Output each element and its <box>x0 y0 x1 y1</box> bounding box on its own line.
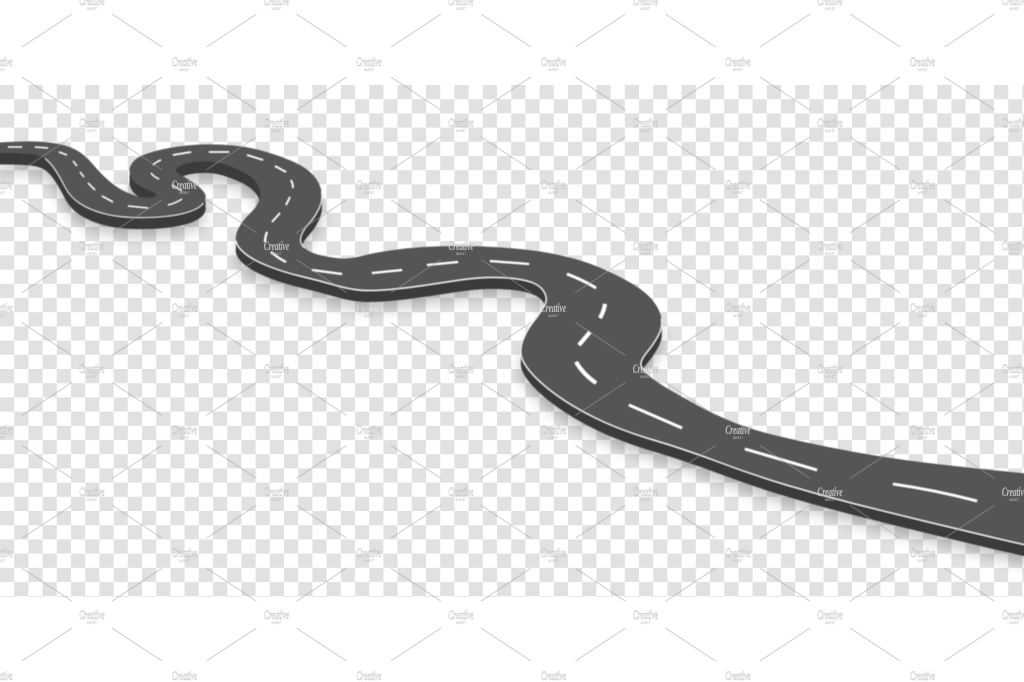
watermark labels: Creative <box>541 422 586 437</box>
watermark labels: MARKET <box>87 129 97 133</box>
white road edge lines <box>45 158 1024 546</box>
watermark labels: MARKET <box>272 375 282 379</box>
watermark labels: MARKET <box>180 559 190 563</box>
watermark labels: Creative <box>817 484 862 499</box>
watermark labels: Creative <box>172 545 217 560</box>
watermark labels: Creative <box>264 238 309 253</box>
watermark labels: MARKET <box>272 129 282 133</box>
watermark labels: MARKET <box>733 314 743 318</box>
watermark labels: MARKET <box>456 621 466 625</box>
watermark labels: MARKET <box>549 559 559 563</box>
watermark labels: MARKET <box>549 436 559 440</box>
watermark labels: Creative <box>79 607 124 622</box>
watermark labels: MARKET <box>456 498 466 502</box>
watermark labels: MARKET <box>825 498 835 502</box>
watermark labels: MARKET <box>180 314 190 318</box>
watermark labels: Creative <box>172 422 217 437</box>
watermark labels: Creative <box>356 545 401 560</box>
road top surface <box>0 141 1024 546</box>
watermark labels: MARKET <box>733 436 743 440</box>
watermark labels: MARKET <box>918 191 928 195</box>
watermark labels: MARKET <box>456 252 466 256</box>
winding road <box>0 141 1024 558</box>
watermark labels: MARKET <box>87 375 97 379</box>
watermark labels: MARKET <box>733 68 743 72</box>
watermark labels: Creative <box>910 300 955 315</box>
watermark labels: MARKET <box>549 191 559 195</box>
watermark labels: MARKET <box>272 252 282 256</box>
watermark labels: Creative <box>725 177 770 192</box>
watermark labels: Creative <box>910 422 955 437</box>
watermark labels: Creative <box>79 361 124 376</box>
road side wall <box>0 147 1024 558</box>
watermark labels: MARKET <box>272 621 282 625</box>
watermark labels: Creative <box>79 238 124 253</box>
watermark labels: Creative <box>633 361 678 376</box>
watermark labels: MARKET <box>272 498 282 502</box>
watermark labels: Creative <box>172 300 217 315</box>
watermark labels: MARKET <box>549 314 559 318</box>
watermark labels: MARKET <box>456 7 466 11</box>
watermark labels: MARKET <box>549 68 559 72</box>
watermark labels: Creative <box>541 300 586 315</box>
watermark labels: MARKET <box>918 314 928 318</box>
watermark labels: Creative <box>817 607 862 622</box>
watermark labels: Creative <box>633 484 678 499</box>
watermark labels: Creative <box>448 115 493 130</box>
watermark labels: Creative <box>633 115 678 130</box>
watermark labels: MARKET <box>733 191 743 195</box>
watermark labels: MARKET <box>364 191 374 195</box>
watermark labels: MARKET <box>456 375 466 379</box>
watermark labels: MARKET <box>641 621 651 625</box>
watermark labels: Creative <box>633 607 678 622</box>
watermark labels: Creative <box>817 361 862 376</box>
watermark labels: MARKET <box>87 7 97 11</box>
watermark labels: MARKET <box>87 252 97 256</box>
watermark labels: MARKET <box>364 68 374 72</box>
watermark labels: MARKET <box>87 498 97 502</box>
watermark labels: Creative <box>264 484 309 499</box>
watermark labels: Creative <box>541 54 586 69</box>
watermark labels: MARKET <box>825 129 835 133</box>
watermark labels: MARKET <box>918 559 928 563</box>
watermark labels: Creative <box>356 300 401 315</box>
watermark labels: MARKET <box>641 375 651 379</box>
watermark labels: Creative <box>356 422 401 437</box>
checkerboard background <box>0 85 1024 597</box>
centre dashed line <box>8 147 977 501</box>
watermark labels: Creative <box>725 545 770 560</box>
watermark labels: Creative <box>725 54 770 69</box>
watermark labels: MARKET <box>87 621 97 625</box>
watermark labels: Creative <box>448 484 493 499</box>
watermark labels: Creative <box>356 54 401 69</box>
watermark labels: Creative <box>541 545 586 560</box>
watermark labels: Creative <box>541 177 586 192</box>
watermark labels: MARKET <box>180 191 190 195</box>
watermark labels: Creative <box>264 607 309 622</box>
watermark labels: Creative <box>817 238 862 253</box>
watermark labels: Creative <box>725 422 770 437</box>
watermark labels: MARKET <box>364 314 374 318</box>
watermark labels: Creative <box>910 177 955 192</box>
watermark labels: MARKET <box>180 436 190 440</box>
watermark labels: Creative <box>725 300 770 315</box>
watermark labels: MARKET <box>641 7 651 11</box>
watermark labels: Creative <box>172 54 217 69</box>
watermark labels: MARKET <box>641 498 651 502</box>
watermark labels: Creative <box>356 177 401 192</box>
watermark labels: Creative <box>633 238 678 253</box>
watermark labels: Creative <box>448 607 493 622</box>
watermark labels: Creative <box>910 54 955 69</box>
watermark labels: Creative <box>172 177 217 192</box>
watermark labels: MARKET <box>641 129 651 133</box>
watermark labels: MARKET <box>272 7 282 11</box>
watermark labels: Creative <box>448 361 493 376</box>
watermark labels: MARKET <box>456 129 466 133</box>
watermark labels: MARKET <box>733 559 743 563</box>
watermark labels: MARKET <box>825 375 835 379</box>
watermark labels: Creative <box>448 238 493 253</box>
watermark labels: MARKET <box>918 68 928 72</box>
watermark labels: Creative <box>817 115 862 130</box>
watermark labels: Creative <box>79 484 124 499</box>
watermark labels: MARKET <box>825 7 835 11</box>
watermark labels: Creative <box>910 545 955 560</box>
watermark labels: MARKET <box>918 436 928 440</box>
road drop shadow <box>0 160 1024 565</box>
watermark labels: Creative <box>264 361 309 376</box>
watermark labels: MARKET <box>641 252 651 256</box>
watermark labels: MARKET <box>180 68 190 72</box>
watermark labels: MARKET <box>364 436 374 440</box>
watermark labels: MARKET <box>825 621 835 625</box>
watermark labels: MARKET <box>825 252 835 256</box>
watermark labels: Creative <box>79 115 124 130</box>
watermark labels: MARKET <box>364 559 374 563</box>
watermark labels: Creative <box>264 115 309 130</box>
